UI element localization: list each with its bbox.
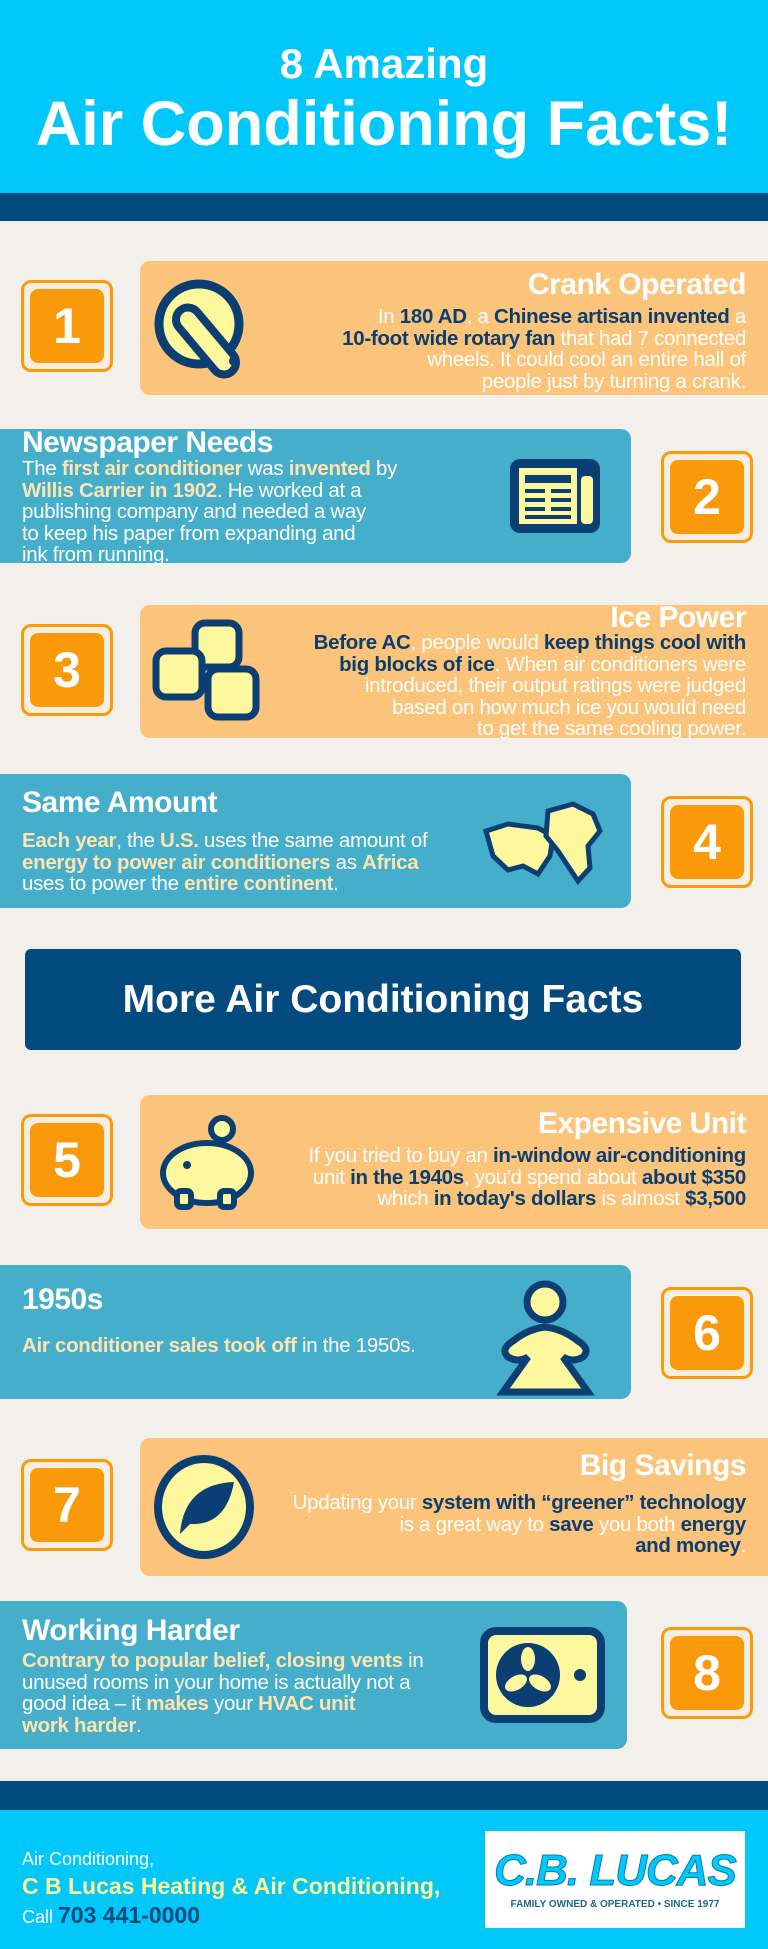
text: work harder. bbox=[22, 1714, 141, 1736]
text: big blocks of ice. When air conditioners were bbox=[339, 652, 746, 676]
text: Updating your system with “greener” technology bbox=[293, 1491, 746, 1514]
number 5 bbox=[21, 1114, 113, 1206]
number 3 bbox=[21, 624, 113, 716]
heading: Newspaper Needs bbox=[22, 426, 273, 459]
panel: fact 7 bbox=[140, 1438, 768, 1576]
number 4: 4 bbox=[693, 814, 721, 870]
panel: fact 4 bbox=[0, 774, 631, 908]
text: introduced, their output ratings were judged bbox=[365, 674, 746, 697]
number 6 bbox=[661, 1287, 753, 1379]
text bbox=[314, 631, 746, 740]
text bbox=[342, 305, 746, 392]
text bbox=[22, 829, 428, 895]
number 7: 7 bbox=[53, 1477, 81, 1533]
text: Air conditioner sales took off in the 1950s. bbox=[22, 1334, 416, 1357]
banner: more facts: More Air Conditioning Facts bbox=[123, 978, 643, 1021]
header bbox=[0, 0, 768, 193]
text: Willis Carrier in 1902. He worked at a bbox=[22, 478, 361, 502]
icon: vent bbox=[480, 1627, 605, 1723]
panel: fact 8 bbox=[0, 1601, 627, 1749]
text: wheels. It could cool an entire hall of bbox=[427, 348, 746, 371]
icon: maps bbox=[483, 801, 603, 885]
footer text: C B Lucas Heating & Air Conditioning, bbox=[22, 1873, 440, 1899]
number 4 bbox=[661, 796, 753, 888]
text: ink from running. bbox=[22, 543, 170, 566]
text: is a great way to save you both energy bbox=[400, 1512, 746, 1536]
number 6: 6 bbox=[693, 1305, 721, 1361]
text: The first air conditioner was invented by bbox=[22, 457, 397, 480]
icon: newspaper bbox=[510, 459, 600, 533]
icon: ice cubes bbox=[152, 620, 260, 720]
text: Before AC, people would keep things cool with bbox=[314, 631, 746, 654]
number 8: 8 bbox=[693, 1645, 721, 1701]
icon: crank bbox=[154, 280, 244, 378]
text bbox=[22, 1649, 423, 1736]
heading: Big Savings bbox=[580, 1449, 746, 1482]
heading: Ice Power bbox=[610, 601, 746, 634]
text bbox=[308, 1144, 746, 1210]
panel: fact 2 bbox=[0, 429, 631, 563]
text: Contrary to popular belief, closing vents in bbox=[22, 1649, 423, 1672]
text: based on how much ice you would need bbox=[392, 696, 746, 718]
icon: person bbox=[496, 1280, 595, 1396]
footer text bbox=[22, 1849, 440, 1928]
footer text: Call 703 441-0000 bbox=[22, 1902, 200, 1928]
text: people just by turning a crank. bbox=[482, 370, 746, 392]
title: Air Conditioning Facts! bbox=[36, 89, 732, 159]
logo bbox=[485, 1831, 745, 1928]
text: to get the same cooling power. bbox=[477, 717, 746, 740]
text: uses to power the entire continent. bbox=[22, 872, 338, 895]
text: good idea – it makes your HVAC unit bbox=[22, 1692, 355, 1715]
number 5: 5 bbox=[53, 1132, 81, 1188]
text: unused rooms in your home is actually not a bbox=[22, 1670, 410, 1694]
number 3: 3 bbox=[53, 642, 81, 698]
panel: fact 5 bbox=[140, 1095, 768, 1229]
banner: more facts bbox=[25, 949, 741, 1050]
text: which in today's dollars is almost $3,500 bbox=[377, 1187, 746, 1210]
panel: fact 3 bbox=[140, 605, 768, 738]
footer text: Air Conditioning, bbox=[22, 1849, 154, 1869]
logo: C.B. LUCAS bbox=[494, 1846, 736, 1895]
number 2: 2 bbox=[693, 469, 721, 525]
text: unit in the 1940s, you'd spend about about $350 bbox=[313, 1166, 746, 1188]
footer bbox=[0, 1810, 768, 1949]
heading: Expensive Unit bbox=[538, 1107, 746, 1140]
text: energy to power air conditioners as Africa bbox=[22, 850, 418, 874]
heading: Working Harder bbox=[22, 1614, 240, 1647]
text bbox=[293, 1491, 746, 1557]
number 1: 1 bbox=[53, 298, 81, 354]
panel: fact 6 bbox=[0, 1265, 631, 1399]
number 1 bbox=[21, 280, 113, 372]
text: publishing company and needed a way bbox=[22, 500, 366, 523]
icon: piggy bank bbox=[160, 1115, 254, 1210]
text: In 180 AD, a Chinese artisan invented a bbox=[378, 305, 746, 328]
number 7 bbox=[21, 1459, 113, 1551]
icon: leaf bbox=[154, 1455, 254, 1559]
logo: FAMILY OWNED & OPERATED • SINCE 1977 bbox=[511, 1899, 719, 1910]
text: If you tried to buy an in-window air-conditioning bbox=[308, 1144, 746, 1167]
title: 8 Amazing bbox=[280, 40, 488, 87]
text: Each year, the U.S. uses the same amount of bbox=[22, 829, 427, 852]
heading: 1950s bbox=[22, 1283, 103, 1316]
heading: Crank Operated bbox=[528, 268, 746, 301]
panel: fact 1 bbox=[140, 261, 768, 395]
text: to keep his paper from expanding and bbox=[22, 522, 355, 544]
text: and money. bbox=[635, 1534, 746, 1557]
text bbox=[22, 457, 398, 566]
heading: Same Amount bbox=[22, 786, 217, 819]
title bbox=[36, 40, 732, 159]
number 8 bbox=[661, 1627, 753, 1719]
text: 10-foot wide rotary fan that had 7 connected bbox=[342, 326, 746, 350]
number 2 bbox=[661, 451, 753, 543]
